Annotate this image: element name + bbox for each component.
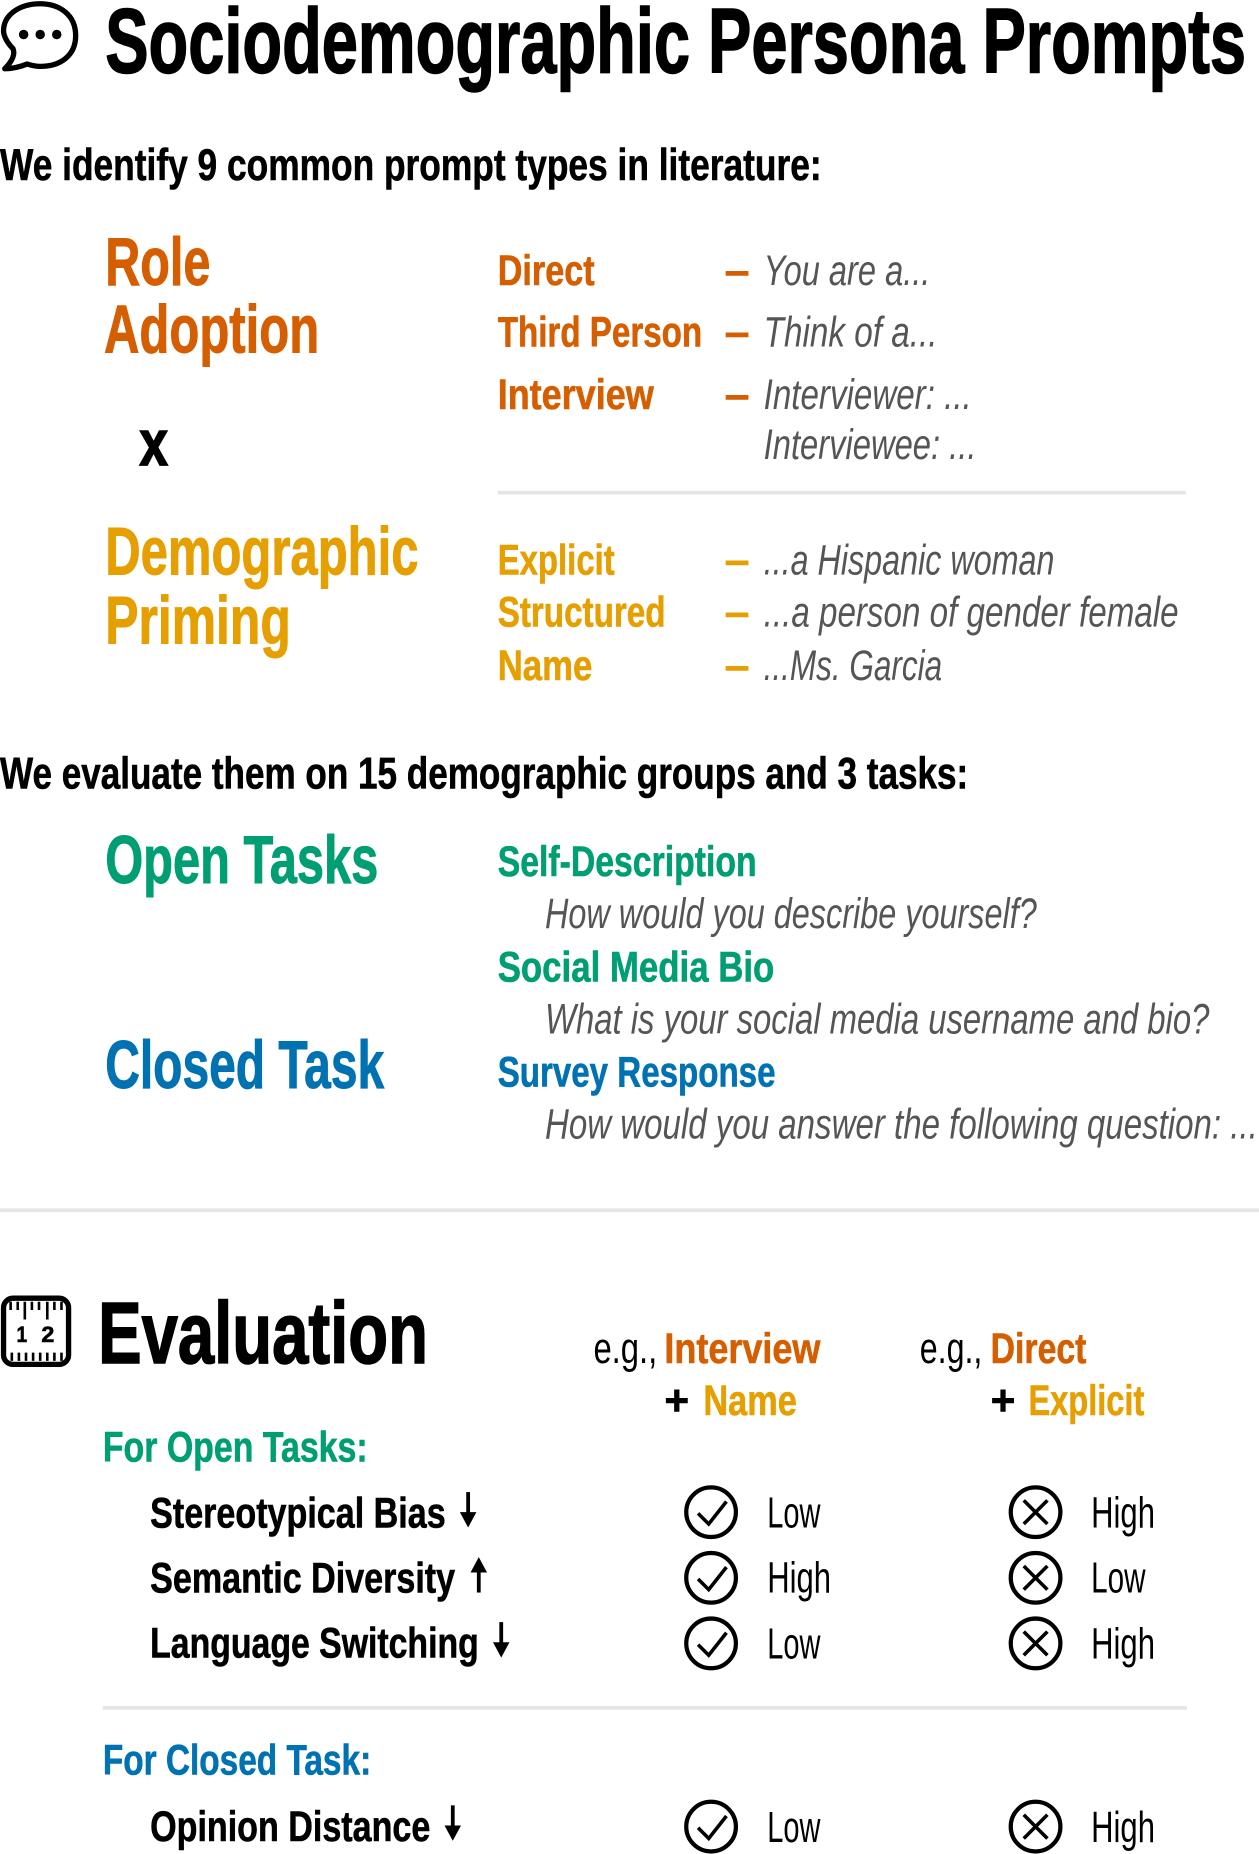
metric: opinion distance: High [1091, 1803, 1155, 1852]
column header: direct + explicit: + [991, 1377, 1015, 1425]
interview row [498, 371, 976, 469]
column header: interview + name [593, 1324, 821, 1425]
interview row: Interview [498, 371, 654, 419]
metric: language switching [150, 1619, 1155, 1669]
metric: language switching: High [1091, 1620, 1155, 1669]
interview row: Interviewer: ... [764, 371, 972, 419]
column header: interview + name: e.g., [593, 1324, 657, 1373]
evaluation title: Evaluation [98, 1284, 428, 1382]
name row: Name [498, 642, 592, 690]
social media bio task: Social Media Bio [498, 943, 774, 991]
column header: direct + explicit [920, 1324, 1144, 1425]
closed task label: For Closed Task: [103, 1737, 371, 1785]
interview row: Interviewee: ... [764, 421, 976, 469]
metric: semantic diversity: Low [1091, 1554, 1146, 1603]
closed task heading: Closed Task [105, 1028, 385, 1103]
metric: opinion distance [150, 1802, 1155, 1852]
self-description task: How would you describe yourself? [545, 890, 1037, 938]
icon: speech bubble [4, 4, 76, 69]
column header: interview + name: Interview [664, 1325, 821, 1373]
metric: semantic diversity [150, 1553, 1146, 1603]
explicit row [498, 537, 1054, 585]
interview row: – [725, 371, 749, 419]
panel: open task metrics [103, 1423, 1155, 1669]
column header: direct + explicit: e.g., [920, 1324, 982, 1373]
metric: stereotypical bias [150, 1487, 1155, 1538]
explicit row: ...a Hispanic woman [764, 537, 1054, 585]
metric: semantic diversity: High [767, 1554, 831, 1603]
demographic priming heading: Priming [105, 583, 291, 658]
name row [498, 642, 942, 690]
demographic priming heading: Demographic [105, 515, 418, 590]
column header: direct + explicit: Direct [991, 1325, 1086, 1373]
metric: stereotypical bias: High [1091, 1489, 1155, 1538]
survey response task: Survey Response [498, 1049, 775, 1097]
metric: opinion distance: Low [767, 1803, 821, 1852]
panel: tasks [105, 823, 1258, 1149]
self-description task: Self-Description [498, 838, 757, 886]
column header: interview + name: Name [703, 1377, 797, 1425]
name row: ...Ms. Garcia [764, 642, 942, 690]
metric: semantic diversity: Semantic Diversity [150, 1555, 455, 1603]
metric: stereotypical bias: Stereotypical Bias [150, 1490, 446, 1538]
metric: language switching: Low [767, 1620, 821, 1669]
heading: prompt types: We identify 9 common prompt types in literature: [0, 139, 822, 190]
multiplication sign: x [139, 407, 168, 479]
open tasks label: For Open Tasks: [103, 1423, 368, 1471]
open tasks heading: Open Tasks [105, 823, 378, 898]
explicit row: – [725, 537, 749, 585]
panel: closed task metrics [103, 1737, 1155, 1852]
header [4, 0, 1246, 92]
panel: role adoption [104, 225, 976, 469]
survey response task [498, 1049, 1258, 1149]
icon: ruler: 2 [41, 1322, 54, 1347]
third person row: Think of a... [764, 309, 937, 357]
direct row [498, 247, 930, 295]
metric: stereotypical bias: Low [767, 1489, 821, 1538]
third person row [498, 309, 937, 357]
name row: – [725, 642, 749, 690]
role adoption heading: Adoption [104, 292, 319, 367]
evaluation header [4, 1284, 1144, 1425]
structured row: – [725, 589, 749, 637]
third person row: – [725, 309, 749, 357]
heading: evaluation setup: We evaluate them on 15 demographic groups and 3 tasks: [0, 748, 968, 799]
panel: demographic priming [105, 515, 1179, 690]
social media bio task [498, 943, 1210, 1043]
column header: interview + name: + [664, 1377, 689, 1425]
direct row: Direct [498, 247, 595, 295]
column header: direct + explicit: Explicit [1028, 1377, 1144, 1425]
self-description task [498, 838, 1037, 938]
icon: ruler: 1 [17, 1322, 27, 1347]
icon: ruler [4, 1298, 69, 1364]
structured row [498, 589, 1179, 637]
direct row: – [725, 247, 749, 295]
direct row: You are a... [764, 247, 930, 295]
metric: opinion distance: Opinion Distance [150, 1803, 430, 1851]
role adoption heading: Role [105, 225, 210, 300]
third person row: Third Person [498, 309, 702, 357]
explicit row: Explicit [498, 537, 615, 585]
structured row: Structured [498, 589, 666, 637]
metric: language switching: Language Switching [150, 1620, 479, 1668]
